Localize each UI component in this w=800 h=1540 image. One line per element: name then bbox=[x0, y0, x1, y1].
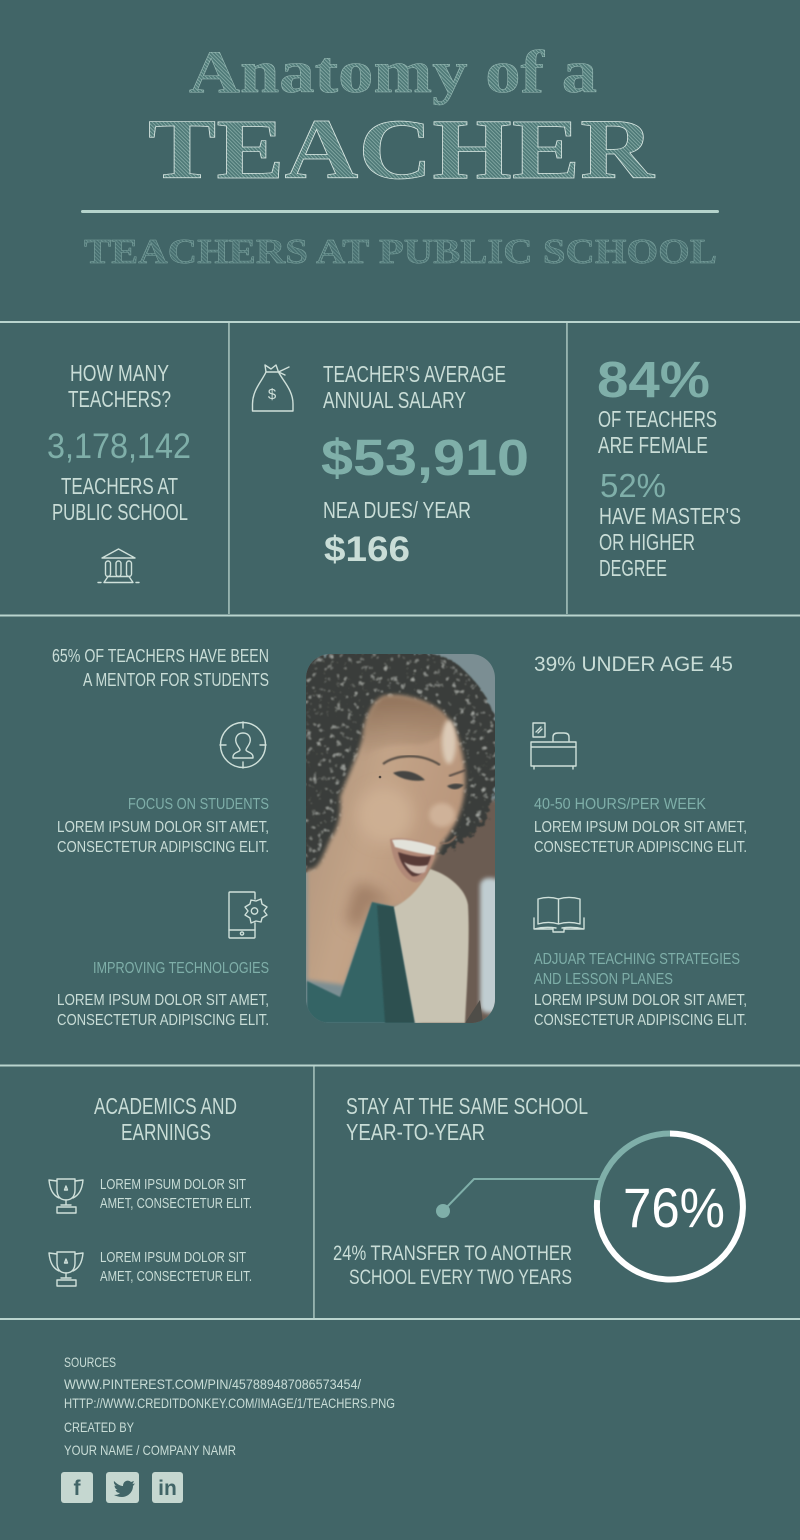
heading: teaching strategies: ADJUAR TEACHING STRATEGIES bbox=[534, 951, 740, 968]
icon: teacher desk bbox=[531, 723, 576, 769]
heading: academics and earnings: ACADEMICS AND bbox=[94, 1093, 237, 1119]
panel: right column: CONSECTETUR ADIPISCING ELIT. bbox=[534, 1012, 747, 1029]
text: mentor stat: 65% OF TEACHERS HAVE BEEN bbox=[52, 646, 269, 666]
divider line bbox=[81, 210, 719, 213]
section dividers bbox=[0, 321, 800, 1320]
text: transfer stat: 24% TRANSFER TO ANOTHER bbox=[333, 1242, 572, 1265]
panel: academics and earnings bbox=[49, 1093, 252, 1286]
label: teachers at public school: TEACHERS AT bbox=[61, 473, 178, 499]
heading: focus on students: FOCUS ON STUDENTS bbox=[128, 796, 269, 813]
footer bbox=[61, 1354, 395, 1503]
icon: trophy bbox=[49, 1179, 83, 1213]
heading: how many teachers: HOW MANY bbox=[70, 360, 169, 386]
text: lorem ipsum: LOREM IPSUM DOLOR SIT bbox=[100, 1249, 246, 1266]
donut chart: 76 percent bbox=[597, 1133, 743, 1279]
panel: left column: A MENTOR FOR STUDENTS bbox=[83, 670, 269, 690]
panel: how many teachers: PUBLIC SCHOOL bbox=[52, 499, 188, 525]
heading: improving technologies: IMPROVING TECHNOLOGIES bbox=[93, 960, 269, 977]
text: lorem ipsum: LOREM IPSUM DOLOR SIT AMET, bbox=[534, 992, 747, 1009]
panel: academics and earnings: AMET, CONSECTETUR ELIT. bbox=[100, 1268, 252, 1285]
icon: money bag: $ bbox=[268, 386, 277, 403]
panel: left column: CONSECTETUR ADIPISCING ELIT. bbox=[57, 1012, 269, 1029]
title: TEACHER: TEACHER bbox=[148, 101, 655, 197]
icon: student target bbox=[220, 722, 266, 768]
icon: phone with gear bbox=[229, 892, 267, 938]
title: Anatomy of a: Anatomy of a bbox=[189, 39, 597, 105]
label: NEA dues: NEA DUES/ YEAR bbox=[323, 497, 471, 523]
text: age stat: 39% UNDER AGE 45 bbox=[534, 653, 733, 676]
panel: academics and earnings: AMET, CONSECTETUR ELIT. bbox=[100, 1195, 252, 1212]
panel: left column: CONSECTETUR ADIPISCING ELIT. bbox=[57, 839, 269, 856]
panel: right column: AND LESSON PLANES bbox=[534, 971, 673, 988]
leader line with dot bbox=[436, 1179, 600, 1218]
text: sources: SOURCES bbox=[64, 1354, 116, 1370]
panel: salary: ANNUAL SALARY bbox=[323, 387, 466, 413]
panel: right column bbox=[531, 653, 747, 1029]
icon: trophy bbox=[49, 1252, 83, 1286]
heading: average salary: TEACHER'S AVERAGE bbox=[323, 361, 506, 387]
panel: female and masters stats: OR HIGHER bbox=[599, 529, 695, 555]
icon: linkedin bbox=[152, 1472, 183, 1503]
title block bbox=[81, 39, 719, 271]
panel: stay at same school: SCHOOL EVERY TWO YEARS bbox=[349, 1266, 572, 1289]
number: teachers count: 3,178,142 bbox=[47, 427, 191, 466]
heading: stay at same school: STAY AT THE SAME SCHOOL bbox=[346, 1093, 588, 1119]
footer: WWW.PINTEREST.COM/PIN/457889487086573454/ bbox=[64, 1376, 361, 1392]
panel: how many teachers: TEACHERS? bbox=[68, 386, 171, 412]
panel: salary bbox=[252, 361, 529, 569]
panel: female and masters stats: ARE FEMALE bbox=[598, 432, 708, 458]
text: lorem ipsum: LOREM IPSUM DOLOR SIT AMET, bbox=[57, 992, 269, 1009]
photo: laughing teacher bbox=[306, 654, 495, 1023]
subtitle: TEACHERS AT PUBLIC SCHOOL bbox=[84, 232, 717, 271]
icon: school building bbox=[98, 549, 139, 582]
icon: money bag bbox=[252, 365, 293, 411]
panel: right column: CONSECTETUR ADIPISCING ELIT. bbox=[534, 839, 747, 856]
text: lorem ipsum: LOREM IPSUM DOLOR SIT bbox=[100, 1176, 246, 1193]
donut chart: 76 percent: 76% bbox=[623, 1176, 725, 1239]
icon: linkedin: in bbox=[158, 1477, 177, 1500]
number: 52 percent: 52% bbox=[600, 467, 666, 504]
number: salary: $53,910 bbox=[321, 429, 529, 486]
panel: female and masters stats bbox=[597, 351, 741, 581]
panel: stay at same school bbox=[333, 1093, 743, 1289]
icon: twitter bbox=[106, 1472, 139, 1503]
panel: stay at same school: YEAR-TO-YEAR bbox=[346, 1119, 485, 1145]
text: lorem ipsum: LOREM IPSUM DOLOR SIT AMET, bbox=[534, 819, 747, 836]
panel: left column bbox=[52, 646, 269, 1029]
icon: open book bbox=[534, 898, 584, 932]
footer: YOUR NAME / COMPANY NAMR bbox=[64, 1442, 236, 1458]
number: 84 percent: 84% bbox=[597, 351, 710, 408]
heading: hours per week: 40-50 HOURS/PER WEEK bbox=[534, 796, 706, 813]
panel: how many teachers bbox=[47, 360, 191, 582]
panel: female and masters stats: DEGREE bbox=[599, 555, 667, 581]
icon: facebook bbox=[61, 1472, 93, 1503]
number: dues: $166 bbox=[324, 530, 410, 569]
text: lorem ipsum: LOREM IPSUM DOLOR SIT AMET, bbox=[57, 819, 269, 836]
icon: facebook: f bbox=[74, 1477, 82, 1500]
text: created by: CREATED BY bbox=[64, 1419, 135, 1435]
panel: academics and earnings: EARNINGS bbox=[121, 1119, 211, 1145]
label: masters degree: HAVE MASTER'S bbox=[599, 503, 741, 529]
label: of teachers are female: OF TEACHERS bbox=[598, 406, 717, 432]
footer: HTTP://WWW.CREDITDONKEY.COM/IMAGE/1/TEACHERS.PNG bbox=[64, 1395, 395, 1411]
